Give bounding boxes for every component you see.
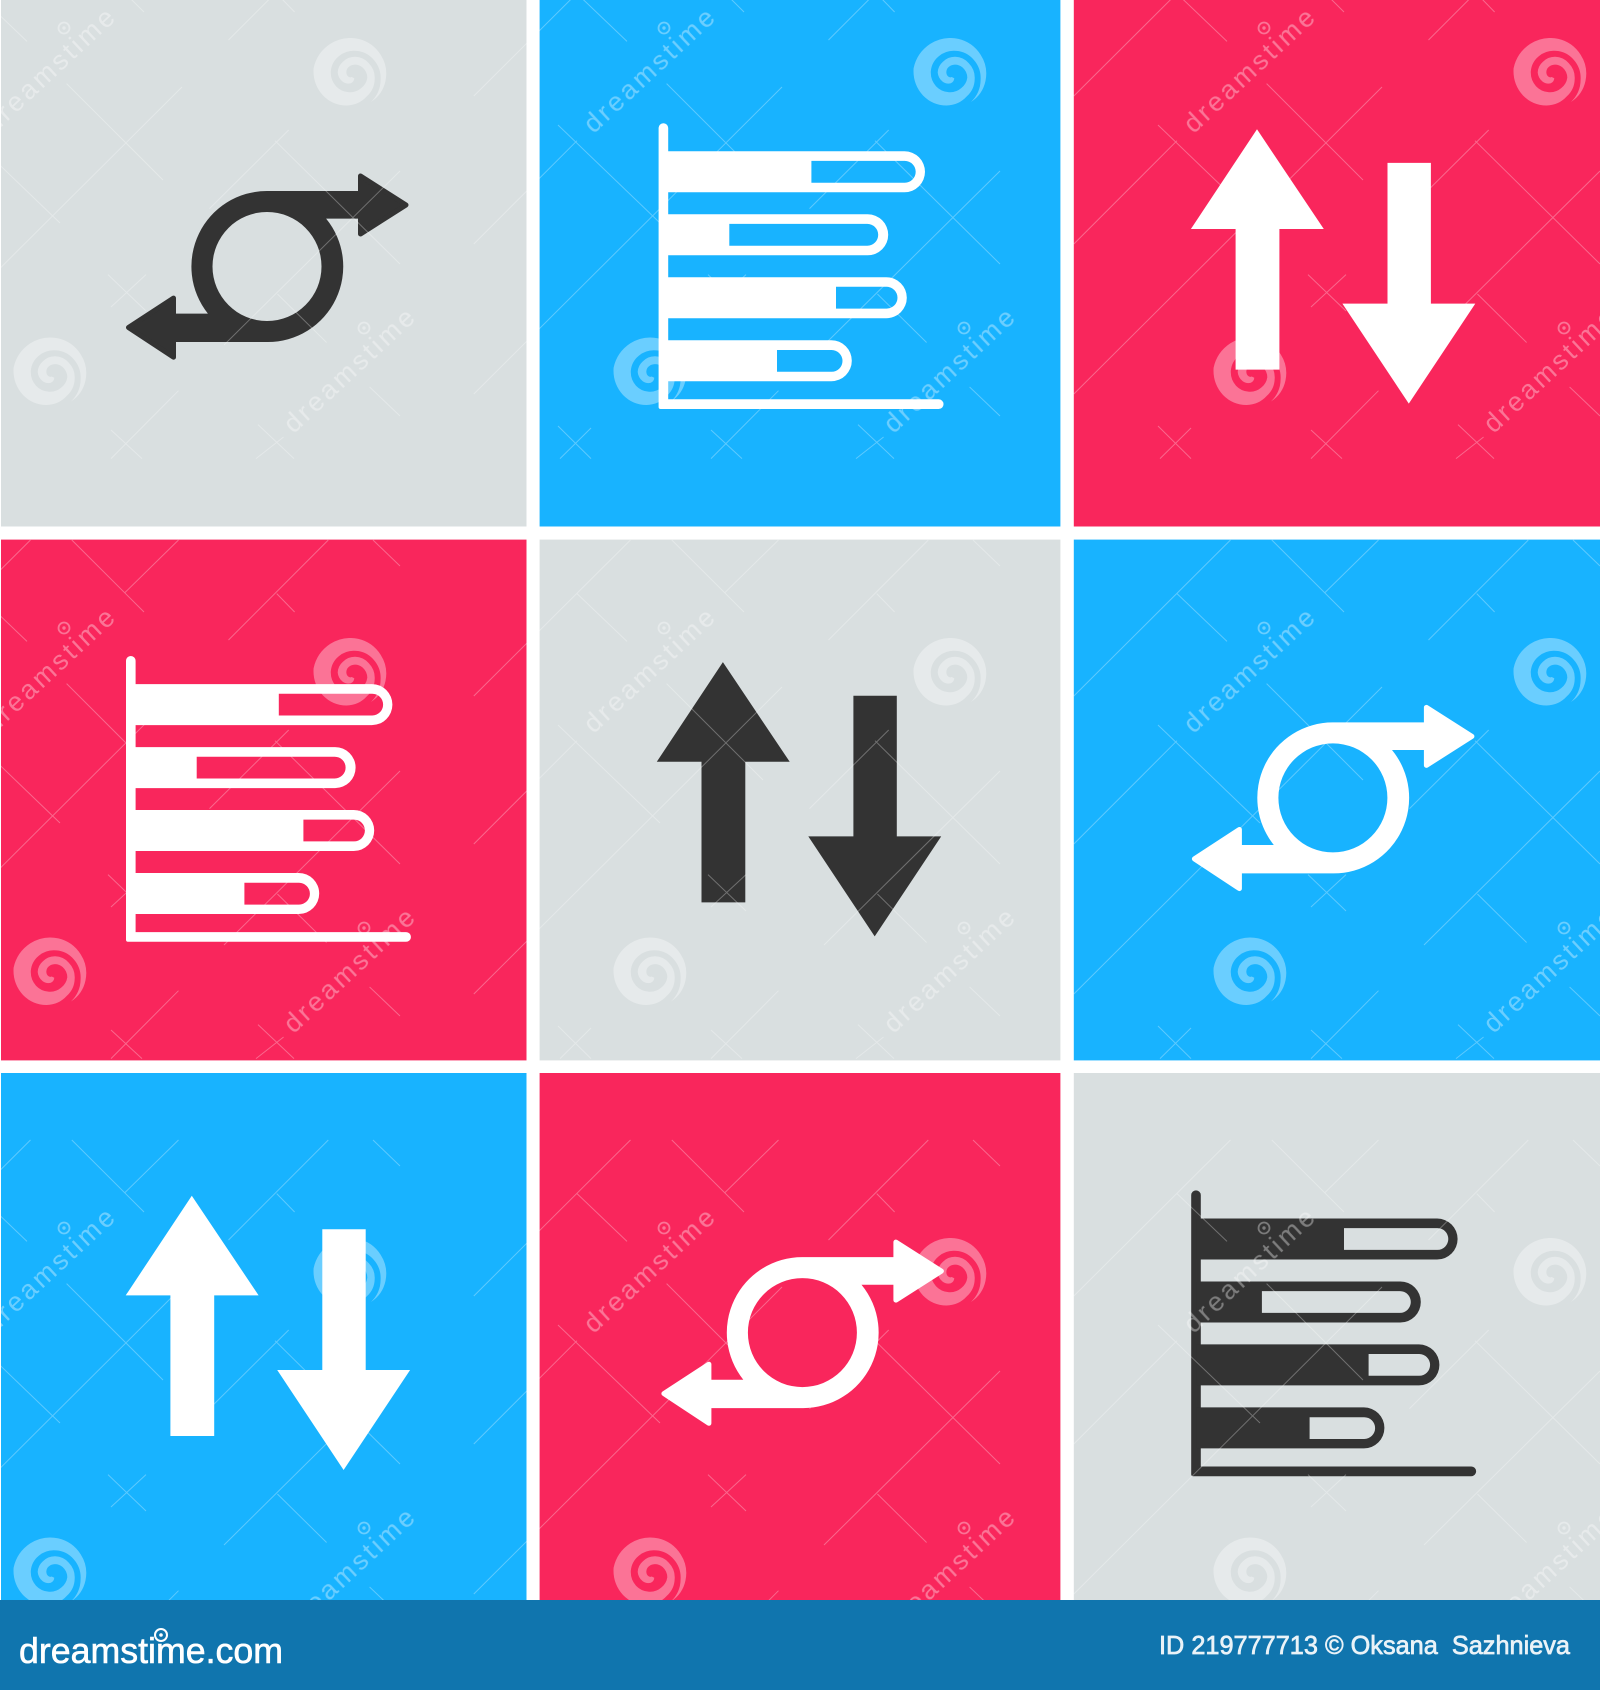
- panel: blue tile with up and down arrows: [1, 1073, 526, 1600]
- icon: up and down arrows white: [1191, 129, 1475, 404]
- watermark text: dreamstime: [1177, 602, 1321, 739]
- panel: gray tile with up and down arrows: [540, 540, 1060, 1060]
- icon: horizontal bar chart dark: [1191, 1190, 1476, 1476]
- panel: red tile with loop arrows: [540, 1073, 1060, 1600]
- panel: blue tile with loop arrows: [1074, 540, 1600, 1060]
- watermark text: dreamstime: [1177, 2, 1321, 139]
- panel: gray tile with bar chart: [1074, 1073, 1600, 1600]
- panel: gray tile with loop arrows: [1, 0, 526, 526]
- image id and author credit: ID 219777713 © Oksana Sazhnieva: [1159, 1630, 1571, 1660]
- icon: horizontal bar chart white: [659, 123, 944, 409]
- watermark text: dreamstime: [577, 1202, 721, 1339]
- watermark text: dreamstime: [277, 302, 421, 439]
- panel: red tile with bar chart: [1, 540, 526, 1060]
- panel: blue tile with bar chart: [540, 0, 1060, 526]
- watermark text: dreamstime: [877, 902, 1021, 1039]
- watermark text: dreamstime: [577, 602, 721, 739]
- icon: loop arrows white: [664, 1242, 941, 1423]
- panel: red tile with up and down arrows: [1074, 0, 1600, 526]
- footer bar: [0, 1600, 1600, 1690]
- watermark text: dreamstime: [277, 902, 421, 1039]
- icon: up and down arrows dark: [657, 662, 941, 936]
- watermark text: dreamstime: [277, 1502, 421, 1639]
- icon: up and down arrows white: [126, 1196, 410, 1470]
- watermark text: dreamstime: [877, 302, 1021, 439]
- footer logo: dreamstime.com: [19, 1630, 283, 1671]
- icon: loop arrows dark: [128, 176, 406, 357]
- icon: loop arrows white: [1194, 707, 1472, 889]
- watermark text: dreamstime: [1177, 1202, 1321, 1339]
- watermark text: dreamstime: [877, 1502, 1021, 1639]
- watermark text: dreamstime: [577, 2, 721, 139]
- icon: horizontal bar chart white: [126, 656, 411, 942]
